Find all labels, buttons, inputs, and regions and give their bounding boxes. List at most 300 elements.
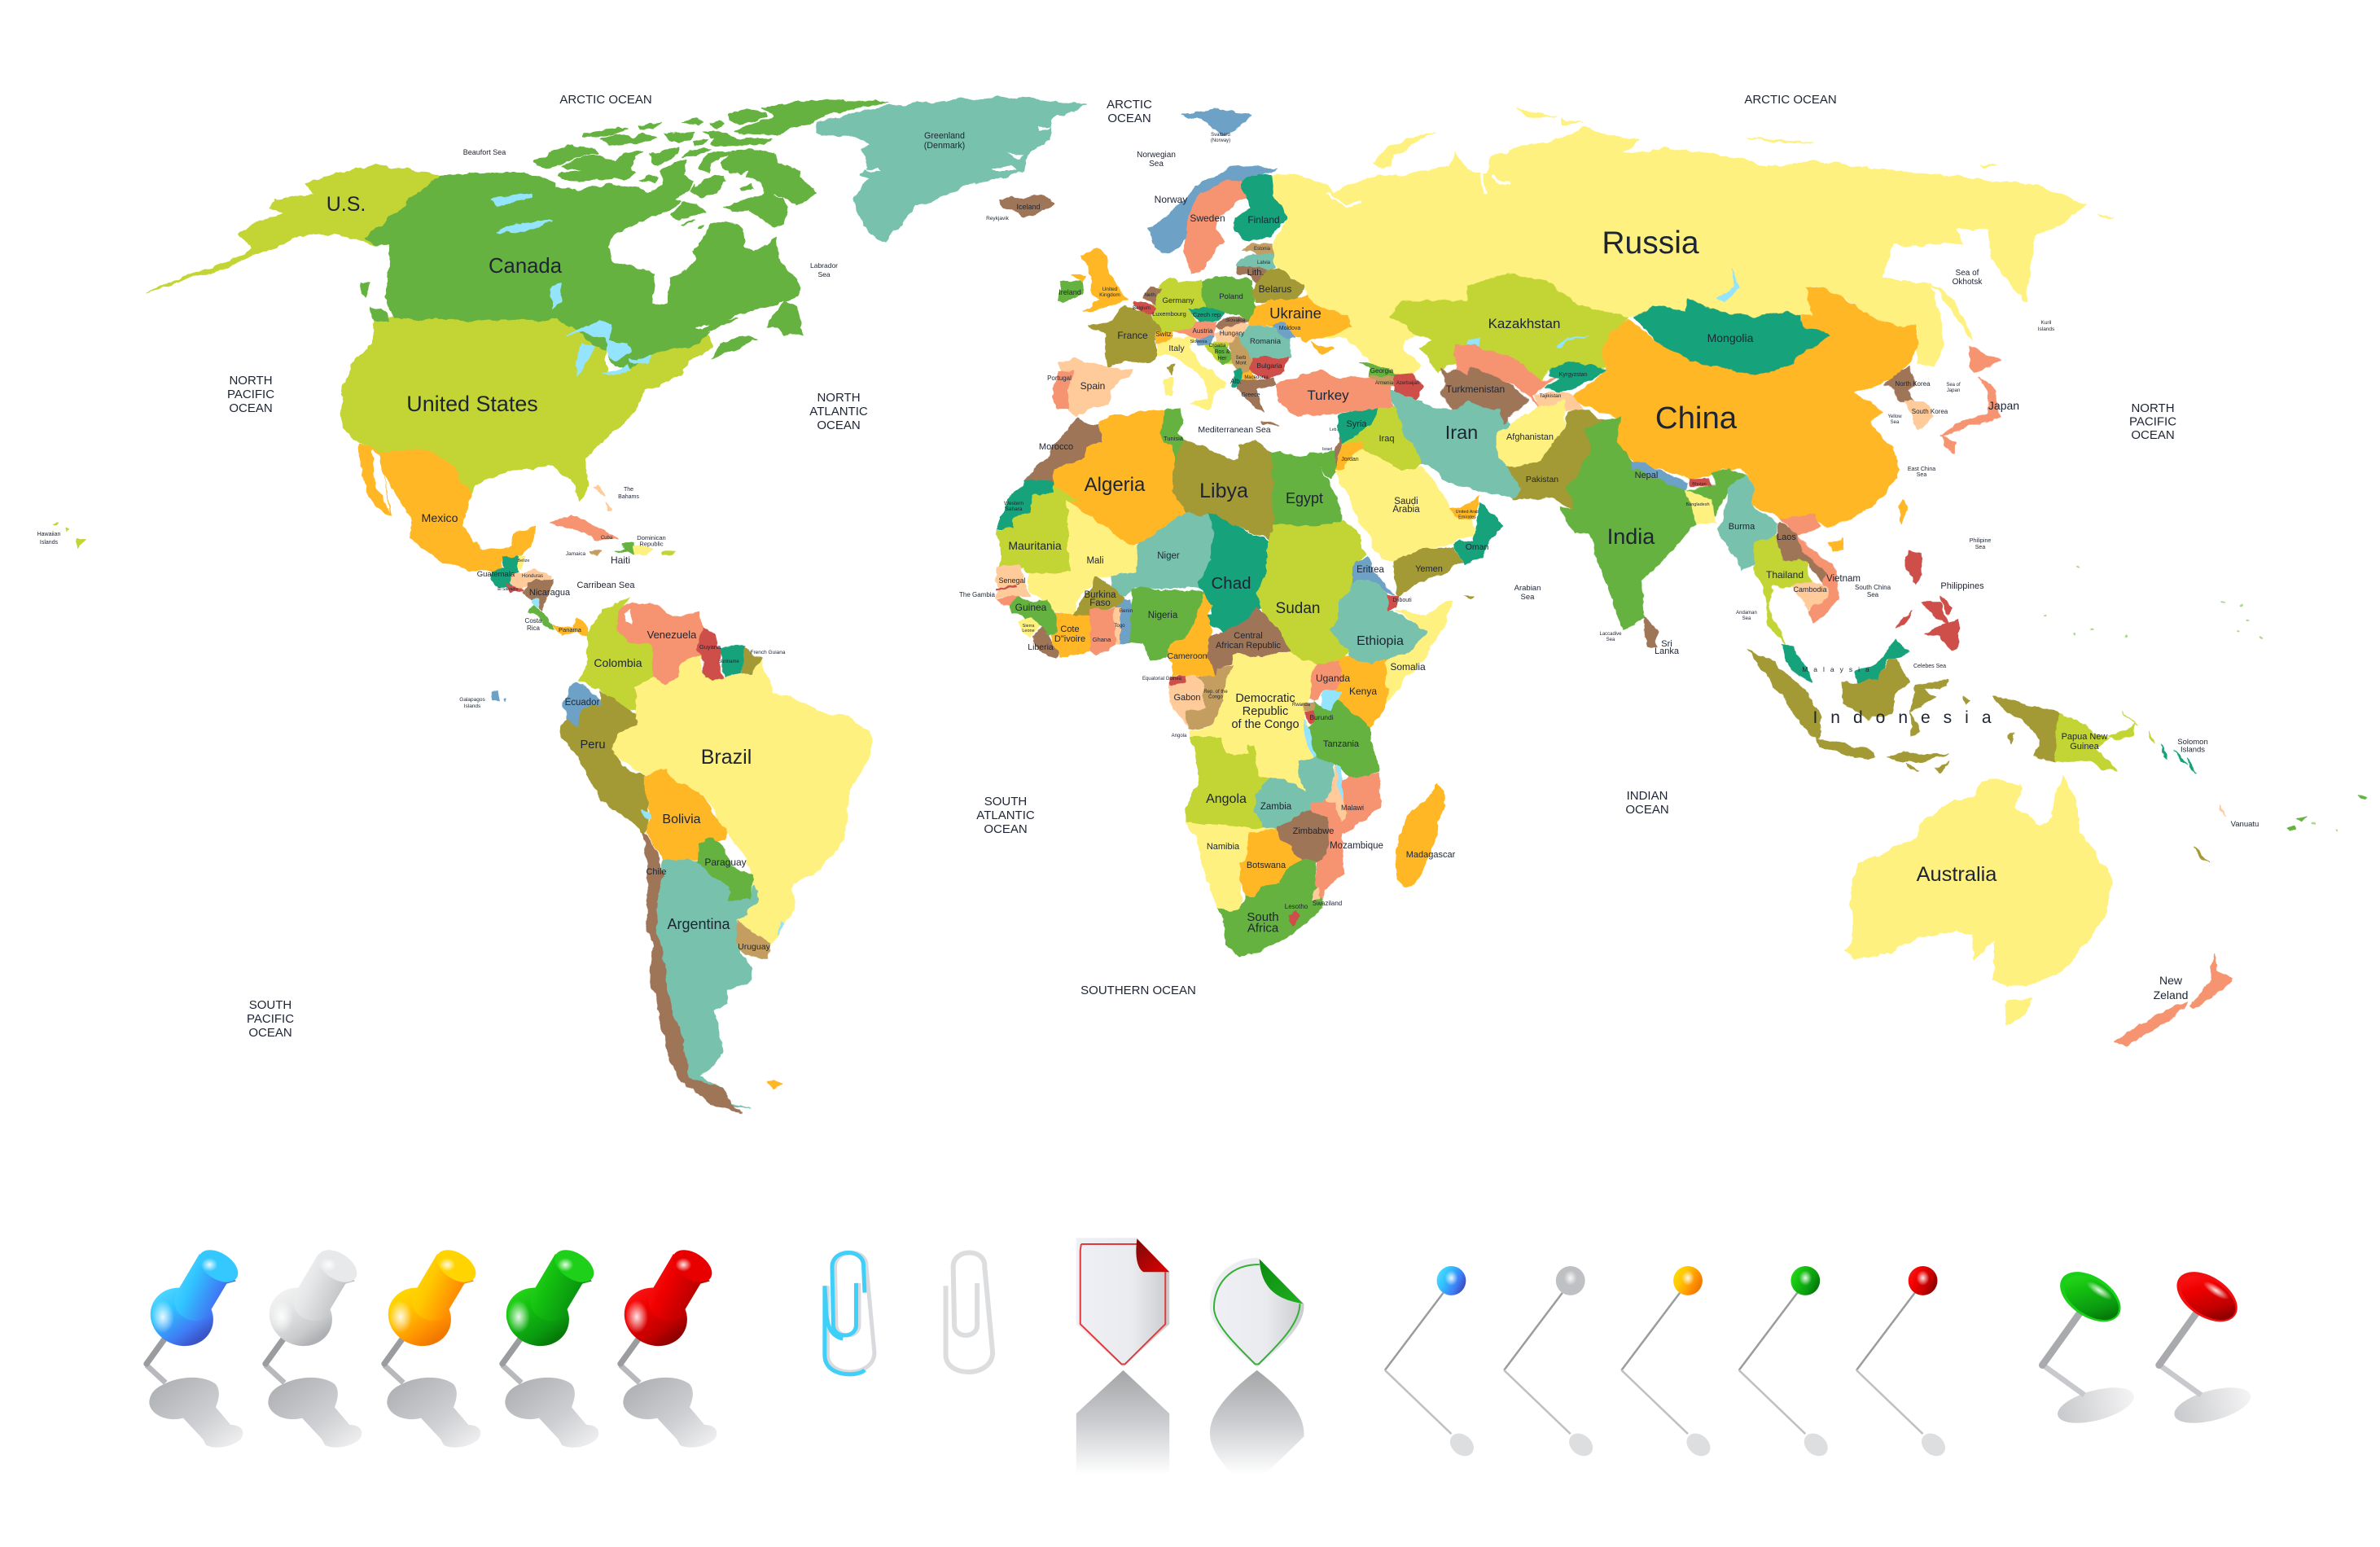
country: Austria <box>1174 322 1216 337</box>
country: Guatemala <box>491 557 517 587</box>
Ellesmere and Queen Elizabeth islands <box>582 100 889 145</box>
country labels: Americas: Guyana <box>699 643 721 651</box>
Lake Maracaibo <box>625 610 632 623</box>
country labels: Americas: Venezuela <box>647 629 697 641</box>
country: Suriname <box>721 647 744 677</box>
country: Moldova <box>1273 325 1295 339</box>
ocean labels: NORTH <box>817 391 861 405</box>
country labels: Asia and Oceania: India <box>1607 524 1655 549</box>
country labels: Africa and Middle East: Swaziland <box>1313 900 1342 907</box>
country: Kazakhstan <box>1391 274 1629 383</box>
Russian arctic inlets <box>1327 156 1510 207</box>
country labels: Americas: United States <box>406 392 538 416</box>
map pin: silver <box>1504 1266 1596 1457</box>
country labels: Europe: Ireland <box>1059 288 1081 296</box>
country labels: Africa and Middle East: Cote <box>1060 624 1080 634</box>
sea labels: Sea <box>817 270 831 278</box>
country: Cuba <box>551 515 617 540</box>
country labels: Americas: Nicaragua <box>529 588 571 598</box>
country labels: Asia and Oceania: Thailand <box>1766 569 1804 581</box>
country: Thailand <box>1754 536 1812 643</box>
country labels: Africa and Middle East: Central <box>1234 631 1263 641</box>
country: Syria <box>1338 409 1378 445</box>
country: Turkmenistan <box>1440 369 1528 423</box>
country labels: Africa and Middle East: Rwanda <box>1292 703 1311 708</box>
country labels: Africa and Middle East: Cameroon <box>1167 651 1208 661</box>
country: Kenya <box>1335 657 1387 727</box>
country labels: Asia and Oceania: Russia <box>1602 226 1699 261</box>
sea labels: Sea <box>1521 593 1535 602</box>
country labels: Asia and Oceania: Zeland <box>2154 988 2188 1001</box>
Baffin Island <box>699 149 817 226</box>
island: Bougainville <box>2149 733 2156 743</box>
country: Estonia <box>1242 243 1273 256</box>
region: Crimea <box>1313 344 1335 354</box>
country: United Arab Emirates <box>1451 494 1478 518</box>
Lake Malawi <box>1335 765 1343 799</box>
country: Fiji <box>2286 795 2367 831</box>
Aral Sea <box>1469 338 1479 356</box>
Asia <box>1391 270 2001 646</box>
ocean labels: SOUTH <box>984 795 1027 809</box>
country labels: Africa and Middle East: Arabia <box>1392 505 1420 515</box>
country labels: Africa and Middle East: Emirates <box>1458 515 1476 519</box>
country: Ecuador <box>563 682 602 730</box>
country labels: Asia and Oceania: Burma <box>1729 522 1755 532</box>
country: Benin <box>1115 599 1133 644</box>
country: Swaziland <box>1313 889 1320 900</box>
country: United Kingdom <box>1082 250 1127 311</box>
country labels: Africa and Middle East: Republic <box>1243 705 1288 718</box>
country: Ukraine <box>1249 295 1352 344</box>
country: Liberia <box>1032 628 1059 659</box>
Lake Tanganyika <box>1304 719 1316 758</box>
islands: Hawaii <box>55 524 84 546</box>
country labels: Europe <box>986 133 1321 398</box>
country labels: Africa and Middle East: Gabon <box>1173 693 1201 703</box>
country labels: Europe: Belarus <box>1259 283 1291 295</box>
country labels: Africa and Middle East: Angola <box>1172 734 1187 738</box>
country labels: Africa and Middle East: The Gambia <box>959 591 996 598</box>
country labels: Africa and Middle East: African Republic <box>1216 641 1282 651</box>
ocean labels: OCEAN <box>2131 428 2175 442</box>
country labels: Africa and Middle East: Leone <box>1022 629 1035 633</box>
North America: United States <box>146 165 711 501</box>
sea labels: South China <box>1855 584 1891 591</box>
country: Rwanda <box>1304 702 1314 712</box>
country labels: Europe: Portugal <box>1047 375 1072 382</box>
paperclip: silver <box>946 1252 993 1372</box>
country labels: Europe: Reykjavik <box>986 216 1010 221</box>
country: Angola <box>1187 736 1269 828</box>
country labels: Africa and Middle East: Guinea <box>1015 602 1047 613</box>
island: Hainan <box>1830 539 1842 552</box>
island: Socotra <box>1466 596 1472 598</box>
region: Northern Ireland <box>1072 275 1087 282</box>
country: Argentina <box>653 861 758 1108</box>
ocean labels: SOUTH <box>249 998 291 1012</box>
country: Cambodia <box>1794 581 1827 610</box>
country: Niger <box>1111 511 1214 596</box>
sea labels: Andaman <box>1736 611 1757 616</box>
Canada mainland <box>366 161 800 369</box>
country: New Zealand <box>2115 954 2233 1045</box>
country labels: Africa and Middle East: Sahara <box>1006 506 1023 512</box>
country labels: Americas: Guatemala <box>477 570 515 579</box>
push pin: orange <box>379 1243 481 1448</box>
country labels: Europe: Italy <box>1168 344 1185 353</box>
country: Venezuela <box>618 603 703 686</box>
country: Iran <box>1389 390 1521 499</box>
map pin: red <box>1856 1266 1948 1457</box>
country labels: Africa and Middle East <box>959 367 1488 935</box>
island: Corsica <box>1167 366 1172 376</box>
ocean labels: OCEAN <box>984 822 1028 836</box>
Lake Victoria <box>1322 690 1342 712</box>
sea labels: Sea <box>1891 420 1900 425</box>
country labels: Asia and Oceania: Kyrgyzstan <box>1559 372 1587 378</box>
country: Armenia <box>1369 376 1395 385</box>
country: Romania <box>1240 326 1291 359</box>
country labels: Americas: Paraguay <box>704 857 747 868</box>
Gulf of California <box>371 450 389 512</box>
country labels: Americas: Uruguay <box>738 942 771 952</box>
country labels: Europe: Bulgaria <box>1256 362 1282 370</box>
sticker: red-bordered shield <box>1076 1238 1169 1475</box>
country: Chad <box>1199 513 1268 633</box>
country labels: Europe: Sweden <box>1190 213 1225 224</box>
country: Zambia <box>1256 756 1333 828</box>
country labels: Africa and Middle East: Chad <box>1211 574 1251 593</box>
ocean labels: NORTH <box>2131 401 2175 415</box>
country: Tunisia <box>1160 409 1184 463</box>
country: Croatia <box>1205 342 1233 364</box>
country: Germany <box>1151 276 1203 331</box>
country labels: Americas: Argentina <box>667 916 731 932</box>
island: Sardinia <box>1164 379 1172 395</box>
country: Bangladesh <box>1687 490 1714 525</box>
country labels: Americas: Rica <box>527 624 541 632</box>
country labels: Americas: Brazil <box>701 746 752 769</box>
country: Czech Republic <box>1189 306 1224 322</box>
country: Honduras <box>511 571 551 590</box>
country: Mozambique <box>1311 773 1381 898</box>
country: Uganda <box>1307 662 1343 699</box>
country: Kyrgyzstan <box>1544 363 1606 392</box>
sea labels: Japan <box>1947 388 1960 393</box>
country: Belgium <box>1133 301 1155 315</box>
country labels: Americas: Jamaica <box>566 551 585 557</box>
country labels: Africa and Middle East: Sierra <box>1023 624 1034 629</box>
country labels: Europe: Mont <box>1235 362 1247 366</box>
country labels: Europe: Spain <box>1080 380 1105 392</box>
country: Sweden <box>1184 182 1245 274</box>
country: Papua New Guinea <box>2055 711 2137 771</box>
country labels: Africa and Middle East: Kenya <box>1349 686 1377 697</box>
country labels: Asia and Oceania: Japan <box>1988 399 2019 412</box>
country labels: Europe: Switz. <box>1155 331 1173 338</box>
Lake Balkhash <box>1559 337 1588 348</box>
country: Solomon Islands <box>2160 743 2197 773</box>
country labels: Americas <box>37 131 965 952</box>
country: Iceland <box>1000 196 1054 216</box>
country labels: Africa and Middle East: Burkina <box>1085 590 1115 600</box>
country: India <box>1559 418 1745 630</box>
country labels: Africa and Middle East: Africa <box>1247 922 1279 935</box>
country labels: Africa and Middle East: Lesotho <box>1285 903 1308 910</box>
country labels: Europe: Greece <box>1242 392 1260 398</box>
country: Mali <box>1028 501 1137 615</box>
country: Botswana <box>1241 828 1302 897</box>
country labels: Americas: Bahams <box>618 494 639 500</box>
country: Serbia and Montenegro <box>1229 337 1252 373</box>
ocean labels: OCEAN <box>248 1026 292 1040</box>
country labels: Africa and Middle East: Jordan <box>1341 457 1359 462</box>
country labels: Americas: French Guiana <box>751 650 786 655</box>
country labels: Americas: Galapagos <box>459 697 485 703</box>
island: Svalbard <box>1181 110 1251 135</box>
country: Belize <box>517 555 524 570</box>
country: Republic of the Congo <box>1187 664 1233 729</box>
sea labels: Sea of <box>1946 383 1961 388</box>
ocean labels: INDIAN <box>1627 789 1668 803</box>
country labels: Europe: Finland <box>1247 214 1280 226</box>
country labels: Asia and Oceania: Islands <box>2181 746 2205 754</box>
ocean labels: NORTH <box>229 374 273 388</box>
country labels: Asia and Oceania: Afghanistan <box>1506 432 1554 442</box>
country labels: Europe: Slovenia <box>1190 340 1208 344</box>
country labels: Asia and Oceania: Bangladesh <box>1685 502 1710 507</box>
country labels: Africa and Middle East: Niger <box>1157 551 1180 561</box>
ocean labels: PACIFIC <box>2129 415 2176 428</box>
Lagoa dos Patos <box>777 923 784 936</box>
country: Bhutan <box>1690 477 1712 487</box>
ocean labels: SOUTHERN OCEAN <box>1080 984 1196 997</box>
country labels: Europe: Neth. <box>1144 292 1157 298</box>
country labels: Africa and Middle East: Mali <box>1086 556 1104 566</box>
push pin: green <box>497 1243 599 1448</box>
country: Central African Republic <box>1208 609 1291 676</box>
country: Western Sahara <box>997 480 1053 528</box>
country labels: Asia and Oceania: Indonesia <box>1812 708 2005 727</box>
country labels: Asia and Oceania: Mongolia <box>1707 331 1754 344</box>
country labels: Asia and Oceania: Vanuatu <box>2231 820 2259 829</box>
Lake Titicaca <box>642 810 651 819</box>
ocean labels: OCEAN <box>1107 112 1151 125</box>
island: Taiwan <box>1899 499 1909 523</box>
country: Mexico <box>360 443 536 572</box>
country labels: Africa and Middle East: Yemen <box>1415 564 1443 574</box>
country: Zimbabwe <box>1276 811 1328 862</box>
sea labels: Labrador <box>810 261 838 270</box>
country: Sri Lanka <box>1644 617 1656 646</box>
country: Chile <box>644 831 742 1113</box>
island: Tasmania <box>2005 1000 2032 1023</box>
country labels: Asia and Oceania: Australia <box>1917 863 1997 886</box>
country labels: Africa and Middle East: Saudi <box>1394 497 1418 506</box>
country labels: Asia and Oceania: Kazakhstan <box>1488 316 1560 331</box>
country: Laos <box>1775 521 1827 583</box>
country labels: Europe: Belgium <box>1133 306 1151 311</box>
country labels: Africa and Middle East: Sudan <box>1276 600 1320 617</box>
country: Poland <box>1198 278 1256 318</box>
country: Turkey <box>1276 371 1394 417</box>
country labels: Africa and Middle East: South <box>1247 910 1279 924</box>
country: Afghanistan <box>1498 401 1565 467</box>
ocean labels <box>227 93 2176 1040</box>
country labels: Africa and Middle East: Rep. of the <box>1203 690 1228 695</box>
island: Novaya Zemlya <box>1373 132 1434 169</box>
country labels: Europe: (Norway) <box>1211 138 1230 143</box>
country: Vanuatu <box>2220 805 2225 817</box>
country: Bolivia <box>644 768 725 862</box>
country labels: Africa and Middle East: Malawi <box>1341 804 1364 812</box>
country labels: Africa and Middle East: Mauritania <box>1008 539 1062 552</box>
country labels: Africa and Middle East: Liberia <box>1028 642 1054 652</box>
country labels: Americas: Islands <box>464 703 481 709</box>
country labels: Africa and Middle East: Morocco <box>1039 442 1073 452</box>
country labels: Americas: Ecuador <box>565 698 600 708</box>
country: Bulgaria <box>1251 356 1287 379</box>
country: Italy <box>1158 335 1227 410</box>
country labels: Europe: Svalbard <box>1211 133 1230 138</box>
country: Egypt <box>1273 451 1342 526</box>
country: Uzbekistan <box>1454 345 1556 409</box>
country: Libya <box>1172 440 1274 541</box>
country: Eritrea <box>1352 556 1394 594</box>
country: Azerbaijan <box>1394 375 1423 400</box>
country labels: Americas: Bolivia <box>662 813 701 826</box>
country labels: Africa and Middle East: Iraq <box>1379 434 1394 444</box>
country: Colombia <box>577 597 653 710</box>
country labels: Africa and Middle East: Djibouti <box>1392 598 1412 603</box>
country labels: Africa and Middle East: Togo <box>1114 624 1125 629</box>
country labels: Americas: Mexico <box>422 512 458 525</box>
country: Greece <box>1238 379 1278 423</box>
country: Guinea <box>1009 596 1056 637</box>
Great Lakes and Canadian lakes <box>491 194 651 375</box>
sea labels: Carribean Sea <box>577 581 635 590</box>
country labels: Europe: Lith. <box>1247 268 1264 278</box>
country: Sudan <box>1256 520 1365 664</box>
country: Philippines <box>1895 551 1959 651</box>
sea labels: East China <box>1908 467 1935 472</box>
country: South Korea <box>1906 401 1934 428</box>
country labels: Africa and Middle East: Libya <box>1199 480 1248 502</box>
sea labels: Sea <box>1917 472 1926 478</box>
South America <box>491 597 873 1113</box>
country labels: Europe: France <box>1117 330 1148 341</box>
ocean labels: PACIFIC <box>227 388 274 401</box>
country labels: Asia and Oceania: South Korea <box>1912 408 1948 415</box>
country labels: Europe: Austria <box>1193 327 1213 335</box>
country: Jordan <box>1336 440 1364 468</box>
country: Switzerland <box>1156 331 1172 342</box>
country: Mauritania <box>997 485 1076 574</box>
sea labels: Okhotsk <box>1953 278 1983 287</box>
country: Yemen <box>1394 547 1462 596</box>
country: Belarus <box>1252 269 1304 301</box>
islands: Falklands <box>765 1082 782 1088</box>
sea labels: Mediterranean Sea <box>1198 425 1271 435</box>
paperclips <box>825 1252 993 1374</box>
country labels: Asia and Oceania: Tajikistan <box>1540 393 1562 399</box>
country: Togo <box>1114 609 1120 645</box>
country labels: Europe: Her <box>1217 356 1227 362</box>
country labels: Africa and Middle East: Madagascar <box>1406 850 1456 860</box>
country labels: Africa and Middle East: Democratic <box>1235 692 1295 705</box>
country labels: Europe: United <box>1102 287 1117 292</box>
push pin: white <box>260 1243 362 1448</box>
country labels: Americas: Islands <box>40 540 59 546</box>
island: New Caledonia <box>2194 848 2210 861</box>
country labels: Asia and Oceania: Solomon <box>2177 738 2208 747</box>
Lake Baikal <box>1717 270 1738 300</box>
country: Dominican Republic <box>634 546 654 555</box>
country labels: Africa and Middle East: Zambia <box>1260 802 1292 812</box>
country labels: Asia and Oceania: Pakistan <box>1526 475 1558 484</box>
country labels: Africa and Middle East: Leb. <box>1330 427 1338 432</box>
country labels: Asia and Oceania: Vietnam <box>1826 574 1861 584</box>
country labels: Europe: Norway <box>1155 194 1187 205</box>
Banks and Victoria islands <box>535 145 712 183</box>
country labels: Africa and Middle East: Zimbabwe <box>1293 826 1334 836</box>
country labels: Americas: Chile <box>646 867 667 877</box>
country labels: Americas: U.S. <box>327 193 366 216</box>
country: Peru <box>561 692 649 831</box>
sea labels: Sea of <box>1956 269 1979 278</box>
country labels: Africa and Middle East: Namibia <box>1207 842 1240 852</box>
country labels: Africa and Middle East: Azerbaijan <box>1396 381 1419 386</box>
country labels: Asia and Oceania: Papua New <box>2062 732 2107 742</box>
island: Puerto Rico <box>663 551 674 555</box>
country: Burundi <box>1304 712 1314 724</box>
country: Macedonia <box>1240 370 1256 380</box>
country: Algeria <box>1053 410 1187 546</box>
country labels: Americas: Costa <box>525 617 541 624</box>
North America: lakes, Mexico, Caribbean <box>55 194 803 638</box>
country labels: Europe: Macedonia <box>1244 375 1269 380</box>
country labels: Africa and Middle East: Faso <box>1089 598 1111 608</box>
Lake Nicaragua <box>532 599 540 608</box>
country: Cote d'Ivoire <box>1051 613 1089 657</box>
country labels: Europe: Iceland <box>1016 203 1041 211</box>
country: Ireland <box>1059 281 1082 301</box>
country labels: Americas: Haiti <box>611 554 630 566</box>
country labels: Asia and Oceania: Laos <box>1777 532 1796 542</box>
country labels: Europe: Latvia <box>1257 261 1271 265</box>
country: Bosnia <box>1212 348 1233 364</box>
flat pin: green <box>2042 1261 2137 1430</box>
country: Israel <box>1333 437 1340 465</box>
country labels: Africa and Middle East: Benin <box>1120 608 1133 614</box>
country labels: Americas: Peru <box>580 738 606 752</box>
map pin: blue <box>1385 1266 1477 1457</box>
country: Cameroon <box>1166 593 1216 676</box>
country: Iraq <box>1340 407 1422 470</box>
sea labels: Sea <box>1606 638 1615 642</box>
sea labels: Sea <box>1975 545 1985 550</box>
country labels: Asia and Oceania: New <box>2159 974 2182 987</box>
country labels: Asia and Oceania: Cambodia <box>1793 585 1827 594</box>
country: Nepal <box>1632 461 1687 490</box>
country labels: Africa and Middle East: Israel <box>1322 447 1332 452</box>
country labels: Asia and Oceania: Nepal <box>1635 471 1658 480</box>
country: Greenland <box>817 98 1085 242</box>
country labels: Europe: Poland <box>1219 292 1243 301</box>
country: Sierra Leone <box>1019 616 1038 637</box>
country: Finland <box>1234 175 1287 240</box>
